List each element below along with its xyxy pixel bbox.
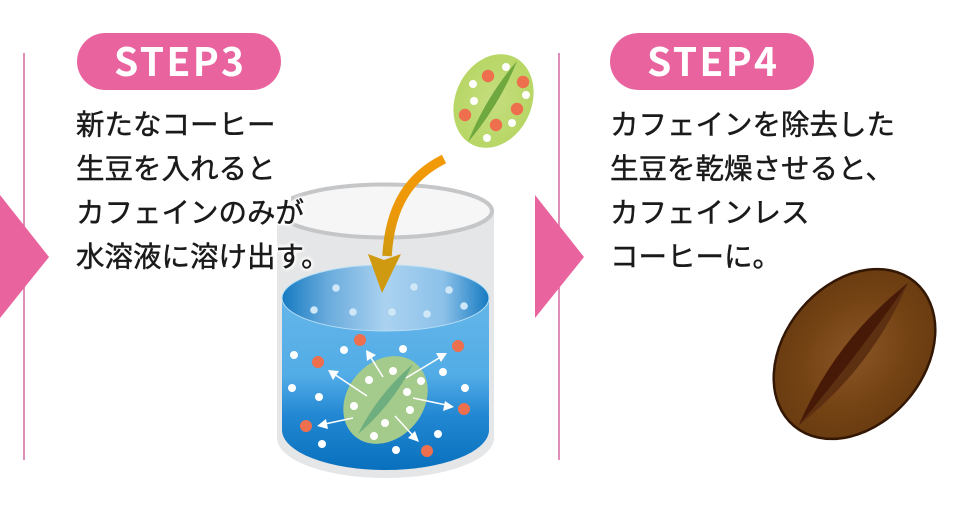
white dots in water <box>288 345 469 454</box>
text: step 3 description: カフェインのみが <box>76 198 304 230</box>
pill: STEP4: STEP4 <box>647 32 777 88</box>
arrow: bean dropped into glass <box>368 159 444 293</box>
pill: STEP3 <box>77 32 281 90</box>
text: step 4 description <box>610 110 895 274</box>
illustration: glass with water and bean <box>270 178 494 478</box>
text: step 3 description: 新たなコーヒー <box>76 110 276 142</box>
water surface <box>282 265 489 331</box>
right divider line <box>558 53 560 460</box>
text: step 3 description: 生豆を入れると <box>76 154 276 186</box>
glass body <box>277 184 494 478</box>
arrow: into step 4 <box>535 195 584 318</box>
text: step 4 description: カフェインを除去した <box>610 110 895 142</box>
arrow: into step 3 <box>0 195 49 318</box>
white cut-out behind the text <box>270 178 291 225</box>
text: step 4 description: コーヒーに。 <box>610 242 781 274</box>
icon: green bean with caffeine <box>439 41 548 161</box>
caffeine dots in water <box>300 334 470 457</box>
left divider line <box>23 53 25 460</box>
water body <box>282 298 489 470</box>
text: step 3 description <box>76 110 330 274</box>
glass rim <box>279 184 492 238</box>
text: step 4 description: 生豆を乾燥させると、 <box>610 154 894 186</box>
pill: STEP3: STEP3 <box>114 32 244 88</box>
surface dots <box>310 283 468 318</box>
submerged bean <box>326 339 445 461</box>
text: step 3 description: 水溶液に溶け出す。 <box>76 242 330 274</box>
text: step 4 description: カフェインレス <box>610 198 810 230</box>
white diffusion arrows <box>317 350 454 442</box>
icon: roasted coffee bean <box>740 237 969 471</box>
pill: STEP4 <box>610 32 814 90</box>
